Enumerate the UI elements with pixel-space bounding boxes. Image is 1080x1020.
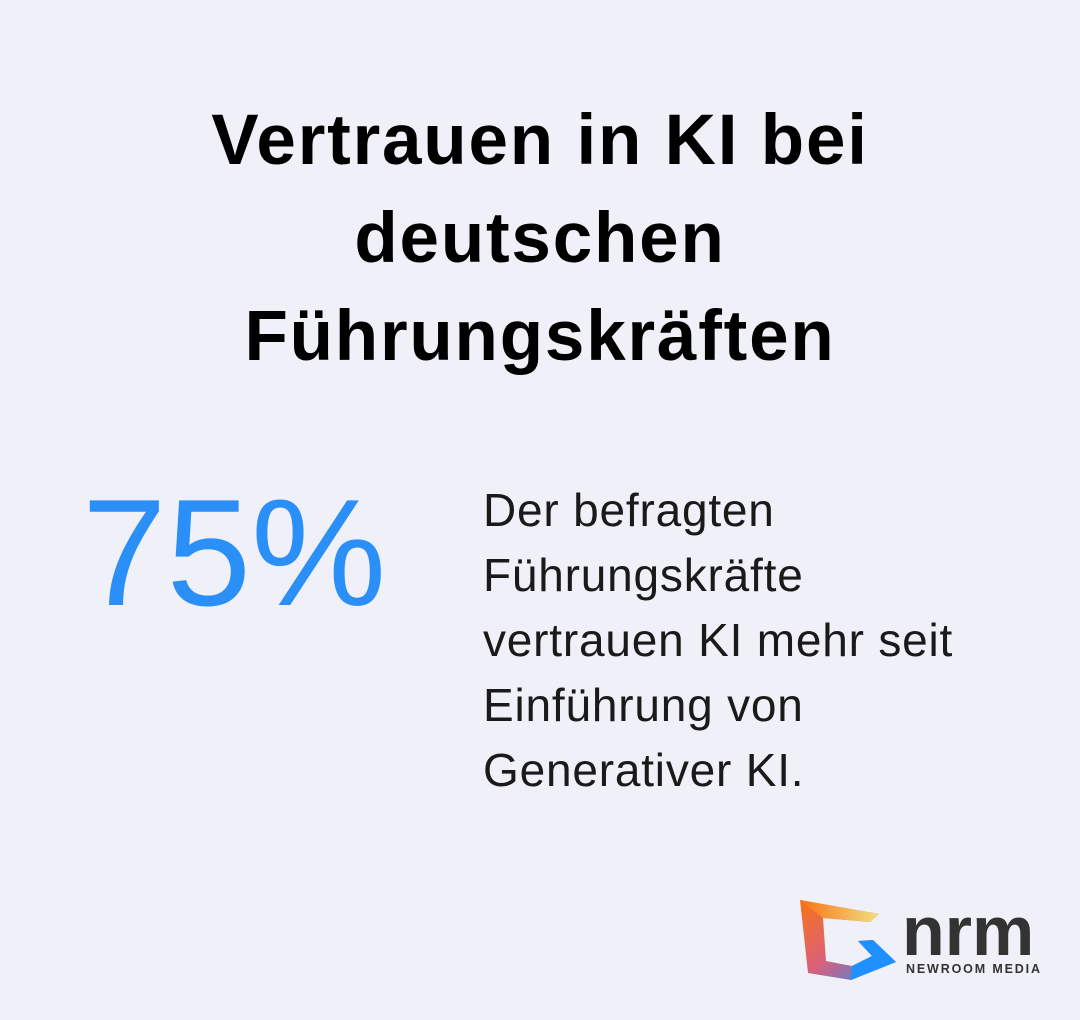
description text: Generativer KI.: [483, 744, 804, 796]
description text: Einführung von: [483, 679, 804, 731]
description text: vertrauen KI mehr seit: [483, 614, 953, 666]
description text: Der befragten: [483, 484, 775, 536]
logo: nrm newroom media: NEWROOM MEDIA: [906, 962, 1040, 976]
title: Führungskräften: [244, 297, 836, 376]
description text: [483, 484, 953, 796]
title: Vertrauen in KI bei: [211, 101, 869, 180]
big stat: 75%: [82, 468, 386, 638]
title: deutschen: [354, 199, 726, 278]
description text: Führungskräfte: [483, 549, 804, 601]
logo: nrm newroom media: [800, 895, 1040, 980]
title: [211, 101, 869, 376]
